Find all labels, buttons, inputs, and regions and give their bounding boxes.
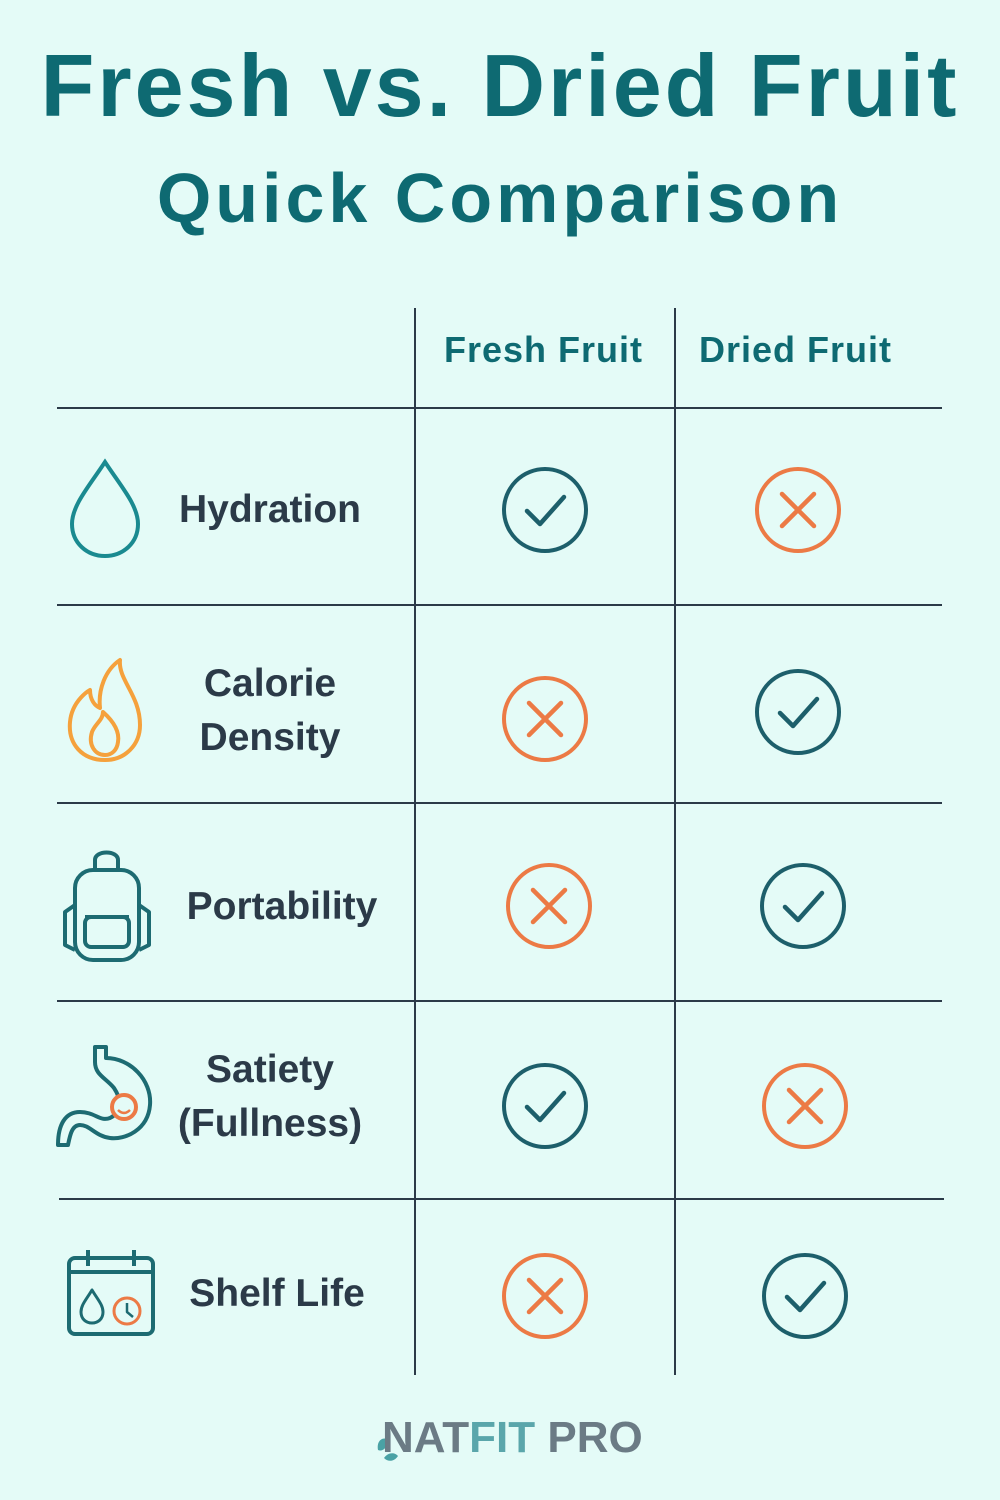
icon: flame [70,660,140,760]
label: hydration: Hydration [179,488,361,531]
label: satiety [178,1048,362,1145]
label: satiety: Satiety [206,1048,334,1091]
label: portability: Portability [187,885,377,928]
icon: calendar [69,1250,153,1334]
icon: backpack [65,852,149,960]
header: fresh fruit: Fresh Fruit [444,329,643,370]
logo leaf [378,1438,398,1461]
label: calorie density [200,662,340,759]
subtitle: Quick Comparison [157,159,843,237]
label: satiety: (Fullness) [178,1102,362,1145]
title: Fresh vs. Dried Fruit [41,36,959,135]
icon: stomach [58,1047,150,1145]
label: calorie density: Calorie [204,662,336,705]
label: calorie density: Density [200,716,340,759]
row marks [504,469,846,1337]
logo: NATFIT PRO [382,1413,643,1462]
icon: water drop [72,462,138,556]
label: shelf life: Shelf Life [189,1272,365,1315]
header: dried fruit: Dried Fruit [699,329,892,370]
